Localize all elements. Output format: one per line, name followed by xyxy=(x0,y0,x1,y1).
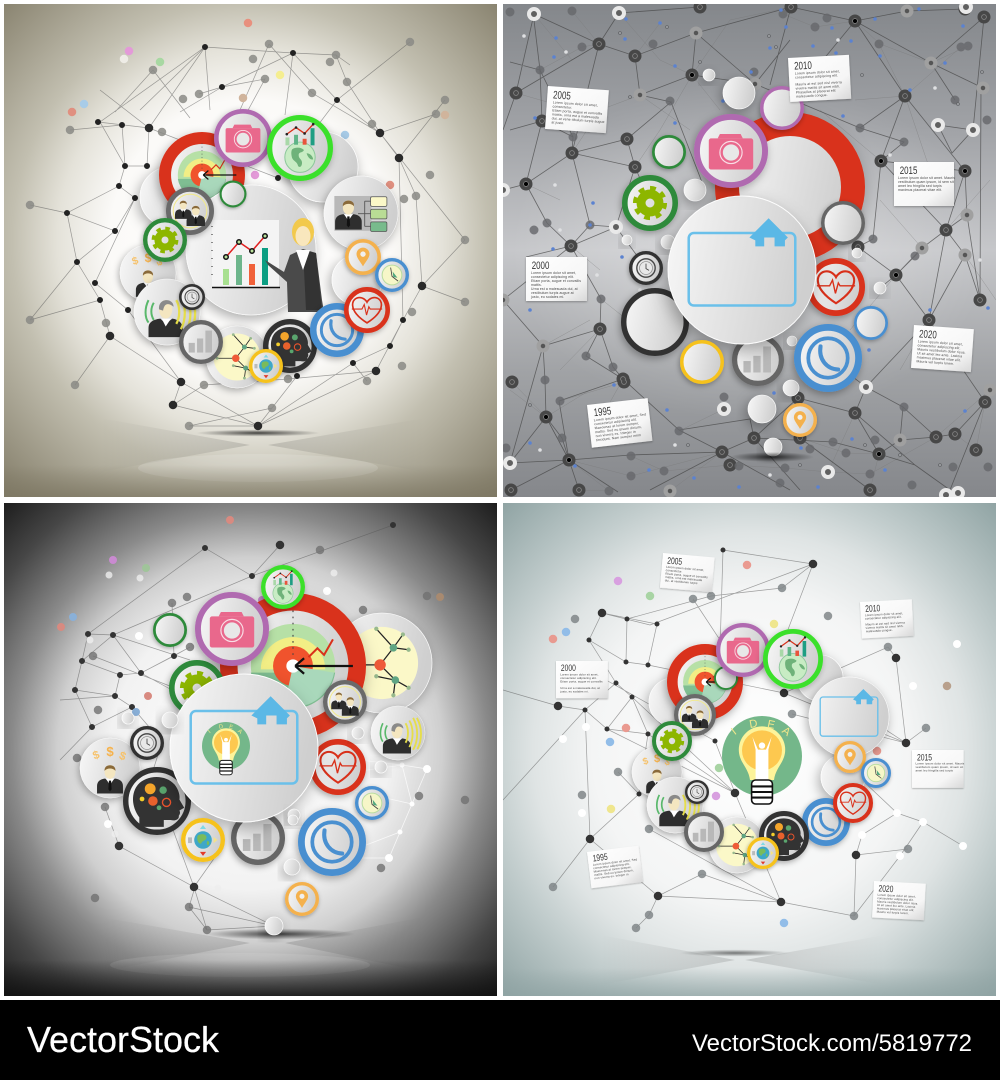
plain floating balls xyxy=(622,69,886,456)
icon: globe xyxy=(251,351,281,381)
icon: group of men xyxy=(325,682,365,722)
note: 2005: Lorem ipsum dolor sit amet, xyxy=(553,100,598,108)
note: 2020 xyxy=(911,325,974,372)
icon: idea bulb small: I xyxy=(207,729,212,735)
note: 2015: amet leo fringilla sed turpis xyxy=(898,184,942,188)
note: 2020: maximus placerat vitae elit. xyxy=(917,355,961,362)
icon: idea bulb large: E xyxy=(766,718,776,732)
icon: heart xyxy=(835,785,871,821)
icon: globe xyxy=(183,820,223,860)
note: 2005: dui, at vestibulum turpis xyxy=(665,578,698,585)
note: 2000: Etiam porta, augue et convallis xyxy=(560,679,603,683)
icon: head with gears xyxy=(762,814,806,858)
icon: speaking man xyxy=(134,279,200,345)
central presenter circle xyxy=(186,185,324,315)
target chart ring xyxy=(229,602,357,730)
note: 2000: 2000 xyxy=(561,663,576,673)
note: 2010: viverra mattis sit amet nibh. xyxy=(796,84,840,91)
note: 1995 xyxy=(587,398,652,448)
icon: gray ring xyxy=(823,203,863,243)
note: 1995: mattis. Sed eu ipsum dictum, xyxy=(594,868,634,877)
note: 2020: Mauris vestibulum dolor risus. xyxy=(917,347,966,355)
note: 2010: consectetur adipiscing elit. xyxy=(865,615,902,621)
icon: gear xyxy=(654,723,690,759)
note: 2020: Mauris vestibulum dolor risus. xyxy=(877,899,918,906)
icon: molecule xyxy=(709,817,765,873)
network: beige panel xyxy=(30,23,465,426)
note: 2020 xyxy=(872,881,926,920)
note: 2000: mattis. xyxy=(531,283,542,287)
icon: idea bulb small xyxy=(202,722,250,775)
note: 2015: 2015 xyxy=(900,165,917,177)
note: 2005: consectetur. xyxy=(666,568,683,574)
note: 2005: Etiam porta, augue et convallis xyxy=(665,572,708,579)
note: 2015: vestibulum quam ipsum, id sem sit xyxy=(898,180,954,184)
ground shadow: gray panel xyxy=(730,452,814,462)
note: 2020: Mauris vel turpis lorem. xyxy=(877,910,909,915)
icon: small green ring xyxy=(221,182,245,206)
icon: gear xyxy=(625,178,675,228)
note: 2010: Mauris at est sed nisl viverra xyxy=(795,80,842,87)
note: 2005: mattis, urna est malesuada xyxy=(665,575,703,582)
icon: pale clock xyxy=(377,260,407,290)
note: 2000: Etiam porta, augue et convallis xyxy=(531,279,581,283)
businesswoman presenter xyxy=(265,218,324,312)
icon: gear xyxy=(172,663,222,713)
note: 2005: 2005 xyxy=(667,556,683,567)
note: 2020: Lorem ipsum dolor sit amet, xyxy=(877,893,916,899)
panel: gray background with network xyxy=(503,4,996,497)
note: 2015: amet leo fringilla sed turpis xyxy=(915,768,953,772)
icon: clock xyxy=(132,728,162,758)
icon: earth with chart xyxy=(270,118,330,178)
note: 2015: vestibulum quam ipsum, id sem sit xyxy=(915,765,963,769)
panel: blue-gray infographic cluster xyxy=(632,625,890,873)
note: 2005 xyxy=(660,553,715,592)
icon: speaking man xyxy=(371,706,425,760)
icon: small purple ring xyxy=(762,88,802,128)
icon: idea bulb large: A xyxy=(779,725,793,739)
icon: earth with chart xyxy=(765,631,821,687)
note: 1995: 1995 xyxy=(593,405,612,420)
network: dark panel xyxy=(60,520,465,930)
network: blue-gray panel xyxy=(503,550,963,928)
icon: clock xyxy=(180,285,204,309)
note: 2010: Phasellus at placerat elit xyxy=(796,89,836,95)
icon: heart xyxy=(810,261,862,313)
icon: camera xyxy=(216,111,270,165)
note: 2005: at justo. xyxy=(551,120,565,125)
panel: blue-gray background with network xyxy=(503,503,996,996)
icon: phone xyxy=(313,306,361,354)
icon: idea bulb small: E xyxy=(228,724,234,731)
icon: small green ring xyxy=(715,667,737,689)
line and bar chart xyxy=(212,220,280,288)
note: 1995: Maecenas at lorem semper, xyxy=(593,865,632,874)
icon: org chart person xyxy=(324,176,398,250)
panel: gray infographic cluster xyxy=(622,69,887,456)
footer URL text: VectorStock.com/5819772 xyxy=(692,1030,972,1057)
back circles xyxy=(649,655,865,799)
note: 2000: Urna est a malesuada dui, at xyxy=(531,287,578,291)
note: 2010: 2010 xyxy=(865,603,881,614)
note: 2010: malesuada congue. xyxy=(796,93,828,99)
note: 1995: Lorem ipsum dolor sit amet, Sed xyxy=(594,412,646,422)
note: 2000: Lorem ipsum dolor sit amet, xyxy=(531,271,576,275)
icon: small blue ring xyxy=(855,307,887,339)
icon: map pin xyxy=(785,405,815,435)
icon: heart xyxy=(313,742,363,792)
note: 1995: Maecenas at lorem semper, xyxy=(594,421,639,430)
note: 2010 xyxy=(860,599,914,638)
icon: bars xyxy=(181,322,221,362)
icon: map pin xyxy=(836,743,864,771)
note: 1995: non viverra ex. Integer in xyxy=(595,430,636,438)
panel: dark infographic cluster xyxy=(80,567,432,935)
icon: yellow ring xyxy=(682,342,722,382)
icon: phone xyxy=(805,801,847,843)
icon: pale clock xyxy=(357,788,387,818)
note: 2015: Lorem ipsum dolor sit amet. Mauris xyxy=(915,762,965,766)
central frame circle xyxy=(170,674,318,822)
note: 2015: Lorem ipsum dolor sit amet. Mauris xyxy=(898,176,955,180)
note: 2000: 2000 xyxy=(532,260,549,272)
icon: phone xyxy=(797,327,859,389)
icon: pale clock xyxy=(862,760,890,786)
central frame circle xyxy=(668,196,816,344)
icon: clock xyxy=(631,253,661,283)
target chart ring xyxy=(165,138,239,212)
note: 1995: non viverra ex. Integer in xyxy=(594,872,629,880)
icon: black ring xyxy=(624,291,686,353)
note: 2015: maximus placerat vitae elit. xyxy=(898,188,942,192)
note: 2010: viverra mattis sit amet nibh. xyxy=(866,624,904,630)
note: 1995: mattis. Sed eu ipsum dictum, xyxy=(595,425,642,434)
icon: home frame circle xyxy=(809,677,889,757)
note: 2005: consectetur. xyxy=(552,104,572,110)
note: 2000: justo, eu sodales mi. xyxy=(530,295,564,299)
icon: camera xyxy=(198,595,266,663)
icon: small green ring xyxy=(653,136,685,168)
plain floating balls xyxy=(122,712,387,935)
icon: green globe xyxy=(263,567,303,607)
icon: home frame xyxy=(689,218,795,306)
note: 2005: 2005 xyxy=(553,89,571,103)
note: 1995: Lorem ipsum dolor sit amet, Sed xyxy=(593,857,638,867)
icon: dollar man xyxy=(632,747,682,797)
icon: dollar man xyxy=(120,245,176,301)
note: 2020: 2020 xyxy=(878,883,894,895)
note: 2000: vestibulum turpis augue at xyxy=(531,291,574,295)
icon: map pin xyxy=(287,884,317,914)
note: 1995: consectetur adipiscing elit. xyxy=(593,862,630,870)
icon: bars xyxy=(686,814,722,850)
icon: idea bulb large: D xyxy=(748,718,758,731)
icon: head with gears xyxy=(266,322,314,370)
icon: idea bulb small: A xyxy=(236,728,243,736)
note: 2010: Lorem ipsum dolor sit amet, xyxy=(795,69,840,76)
icon: phone xyxy=(301,811,363,873)
note: 2000: justo, eu sodales mi. xyxy=(559,689,589,693)
icon: heart xyxy=(346,289,388,331)
icon: head with gears xyxy=(126,770,188,832)
note: 2015: 2015 xyxy=(917,752,932,763)
icon: idea bulb large xyxy=(722,716,802,804)
note: 2005 xyxy=(545,86,609,133)
note: 2020: Ut sit amet leo ante. Lacinia xyxy=(877,903,916,909)
icon: group of men xyxy=(676,696,714,734)
note: 2010 xyxy=(788,55,851,102)
note: 2010: Mauris at est sed nisl viverra xyxy=(865,620,905,627)
icon: group of men xyxy=(168,189,212,233)
note: 2000: consectetur adipiscing elit. xyxy=(531,275,574,279)
icon: globe xyxy=(749,839,777,867)
note: 2020: consectetur adipiscing elit. xyxy=(877,896,914,902)
note: 1995: tincidunt. Nam semper enim xyxy=(596,433,641,442)
note: 2005: Etiam porta, augue et convallis xyxy=(552,108,603,116)
note: 2020: Ut sit amet leo ante. Lacinia xyxy=(917,351,962,358)
note: 2010: consectetur adipiscing elit. xyxy=(795,73,838,80)
note: 2010: malesuada congue. xyxy=(866,628,893,633)
note: 2015 xyxy=(912,750,965,788)
note: 1995: consectetur adipiscing elit. xyxy=(594,417,637,426)
icon: map pin xyxy=(347,241,379,273)
note: 2000: Lorem ipsum dolor sit amet, xyxy=(560,672,599,676)
icon: camera xyxy=(697,117,765,185)
icon: gear xyxy=(145,220,185,260)
note: 2010: 2010 xyxy=(794,60,812,73)
note: 2005: dui, at vene tibulum turpis augue xyxy=(552,116,605,124)
note: 2020: 2020 xyxy=(919,328,937,342)
target chart ring xyxy=(672,649,738,715)
icon: molecule xyxy=(206,326,268,388)
icon: molecule xyxy=(332,613,432,713)
panel: beige infographic cluster xyxy=(120,111,407,388)
icon: bars xyxy=(234,814,282,862)
footer logo text: VectorStock xyxy=(27,1019,220,1060)
note: 2000: Urna est a malesuada dui, at xyxy=(560,686,600,690)
icon: small green ring xyxy=(154,614,186,646)
note: 2000: consectetur adipiscing elit. xyxy=(560,676,597,680)
icon: dollar man xyxy=(80,738,140,798)
note: 2020: Mauris vel turpis lorem. xyxy=(916,359,954,366)
icon: camera xyxy=(718,625,768,675)
back circles xyxy=(140,132,382,305)
footer band xyxy=(0,1000,1000,1080)
note: 2010: Lorem ipsum dolor sit amet, xyxy=(865,611,903,617)
icon: speaking man xyxy=(647,777,703,833)
note: 2005: Lorem ipsum dolor sit amet, xyxy=(666,565,704,572)
red ring back circle xyxy=(727,124,853,250)
note: 1995: 1995 xyxy=(592,852,609,864)
note: 2020: Lorem ipsum dolor sit amet, xyxy=(918,339,963,346)
note: 2020: consectetur adipiscing elit. xyxy=(917,343,961,350)
panel: beige background with network xyxy=(4,4,497,497)
icon: clock xyxy=(686,781,708,803)
panel: dark background with network xyxy=(4,503,497,996)
icon: bars xyxy=(735,337,781,383)
network: gray panel xyxy=(503,7,996,495)
note: 2000 xyxy=(526,257,587,301)
note: 2000 xyxy=(556,661,608,698)
note: 2005: mattis, urna est a malesuada xyxy=(552,112,599,120)
icon: idea bulb small: D xyxy=(218,724,224,731)
note: 2015 xyxy=(894,162,955,206)
note: 1995 xyxy=(587,846,643,888)
note: 2020: maximus placerat vitae elit. xyxy=(877,906,915,912)
icon: idea bulb large: I xyxy=(729,726,739,738)
